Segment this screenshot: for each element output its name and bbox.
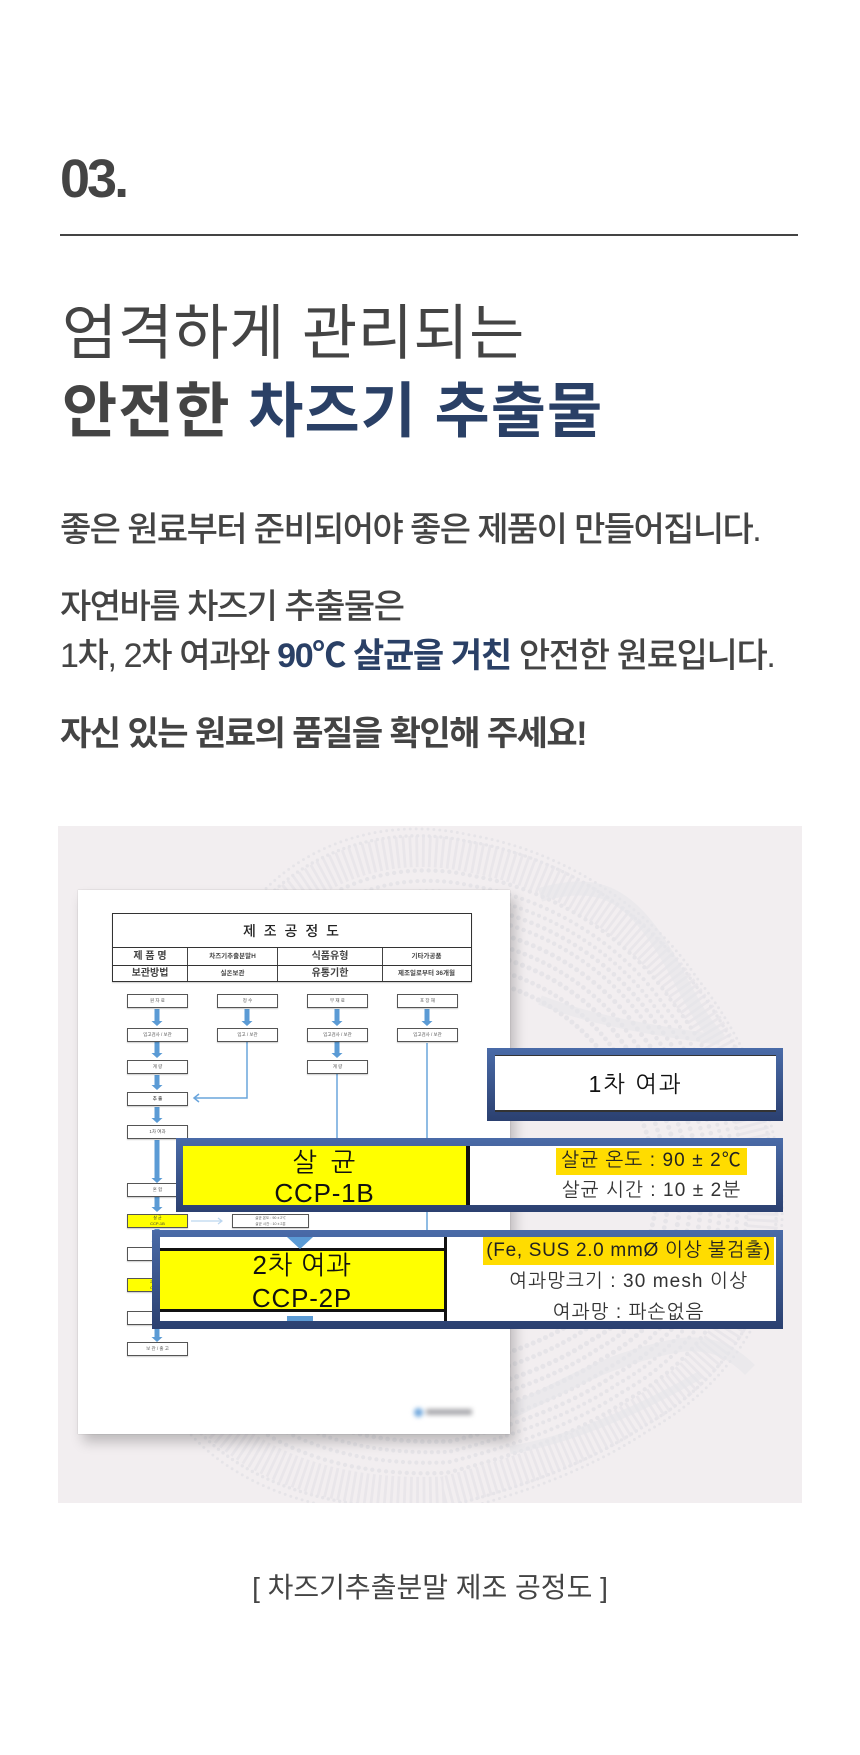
- callout inner: [183, 1146, 776, 1205]
- flow box: 계 량: [333, 1064, 342, 1069]
- flow box: [127, 1247, 188, 1261]
- flow box: [127, 1092, 188, 1106]
- yellow label: [160, 1251, 444, 1309]
- flow box: 입고 / 보관: [237, 1032, 258, 1037]
- table heading: 제 조 공 정 도: [243, 923, 341, 939]
- flow box: 입고검사 / 보관: [143, 1032, 172, 1037]
- flow box: filtering: CCP-2P: [150, 1285, 165, 1290]
- flow box: [307, 1028, 368, 1042]
- flow box: [127, 1028, 188, 1042]
- row 2 label 2: 유통기한: [312, 968, 348, 979]
- flow box: [127, 994, 188, 1008]
- flow box: sterilization detail: 살균 시간 : 10 ± 2분: [255, 1222, 286, 1226]
- row 1 value: [188, 948, 278, 965]
- label code: CCP-1B: [274, 1178, 375, 1208]
- callout: sterilization CCP-1B: [176, 1138, 783, 1212]
- flow box: filtering: 2차 여과: [150, 1279, 165, 1284]
- blurred logo: [411, 1405, 474, 1420]
- logo text: [426, 1409, 472, 1415]
- callout inner: [160, 1237, 776, 1321]
- temperature: 살균 온도 : 90 ± 2℃: [561, 1150, 742, 1171]
- flow box: [397, 994, 458, 1008]
- row 2 value: 실온보관: [221, 970, 244, 977]
- background dotted globe pattern: [190, 828, 784, 1503]
- table: product info: [112, 913, 472, 982]
- title line 1: 엄격하게 관리되는: [62, 300, 525, 367]
- row 1 label 2: [278, 948, 383, 965]
- flow box: sterilization: [127, 1214, 188, 1228]
- body text line 1: 좋은 원료부터 준비되어야 좋은 제품이 만들어집니다.: [60, 511, 760, 549]
- flow box: 입고검사 / 보관: [413, 1032, 442, 1037]
- flow box: [127, 1311, 188, 1325]
- flow box: [127, 1125, 188, 1139]
- callout text: 1차 여과: [588, 1071, 683, 1097]
- label code: CCP-2P: [252, 1283, 352, 1313]
- flow box: 추 출: [153, 1096, 162, 1101]
- flow box: [127, 1060, 188, 1074]
- triangle arrow head: [287, 1237, 313, 1249]
- flow box: 여 과: [153, 1251, 162, 1256]
- flow box: 포 장: [153, 1315, 162, 1320]
- row 1 value 2: 기타가공품: [412, 953, 441, 960]
- divider: [444, 1237, 447, 1321]
- caption: [ 차즈기추출분말 제조 공정도 ]: [252, 1572, 608, 1603]
- panel: manufacturing process chart: [58, 826, 802, 1503]
- section number: 03.: [60, 149, 126, 209]
- label text: 2차 여과: [252, 1250, 352, 1280]
- black rule top: [160, 1248, 447, 1251]
- flow box: 보 관 / 출 고: [146, 1346, 169, 1351]
- flow arrows: [152, 1009, 432, 1342]
- process chart document: [78, 890, 510, 1434]
- callout: 1st filtration: [487, 1048, 783, 1121]
- highlight: [556, 1148, 747, 1175]
- mesh text: 여과망크기 : 30 mesh 이상: [509, 1271, 748, 1292]
- flow box: [307, 1060, 368, 1074]
- flow box: [127, 1183, 188, 1197]
- body text line 3: 1차, 2차 여과와 90℃ 살균을 거친 안전한 원료입니다.: [60, 637, 775, 675]
- row 2 label: [113, 966, 188, 981]
- flow box: 포 장 재: [420, 998, 435, 1003]
- yellow label: [183, 1146, 470, 1205]
- row 2 value: [188, 966, 278, 981]
- highlight: [483, 1237, 774, 1265]
- detection text: (Fe, SUS 2.0 mmØ 이상 불검출): [486, 1240, 771, 1261]
- flow box: 계 량: [153, 1064, 162, 1069]
- flow box: [127, 1342, 188, 1356]
- flow box: [217, 1028, 278, 1042]
- row 1 label 2: 식품유형: [312, 951, 348, 962]
- time: 살균 시간 : 10 ± 2분: [562, 1180, 741, 1201]
- flow box: [307, 994, 368, 1008]
- flow box: 정 수: [243, 998, 252, 1003]
- flow box: 원 자 료: [150, 998, 165, 1003]
- row 2 label: 보관방법: [132, 968, 168, 979]
- flow box: 입고검사 / 보관: [323, 1032, 352, 1037]
- row 1 label: 제 품 명: [133, 951, 167, 962]
- body text bold line: 자신 있는 원료의 품질을 확인해 주세요!: [60, 715, 586, 753]
- damage text: 여과망 : 파손없음: [553, 1302, 704, 1323]
- flow box: [397, 1028, 458, 1042]
- flow box: sterilization: CCP-1B: [150, 1221, 165, 1226]
- flow box: 부 재 료: [330, 998, 345, 1003]
- row 2 value 2: 제조일로부터 36개월: [398, 970, 455, 977]
- arrow stem: [287, 1316, 313, 1321]
- flow box: sterilization: 살 균: [153, 1215, 162, 1220]
- logo mark: [414, 1408, 423, 1417]
- label text: 살 균: [292, 1147, 359, 1177]
- flow box: sterilization detail: 살균 온도 : 90 ± 2℃: [255, 1216, 286, 1220]
- flow box: filtering: [127, 1278, 188, 1292]
- black rule bottom: [160, 1309, 447, 1312]
- callout: 2nd filtration CCP-2P: [152, 1230, 783, 1329]
- flow box: 1차 여과: [149, 1129, 166, 1134]
- flow box: [217, 994, 278, 1008]
- callout inner: [495, 1055, 776, 1112]
- flow box: sterilization detail: [232, 1214, 309, 1228]
- flow box: 혼 합: [153, 1187, 162, 1192]
- title line 2: 안전한 차즈기 추출물: [62, 378, 603, 445]
- row 2 label 2: [278, 966, 383, 981]
- body text line 2: 자연바름 차즈기 추출물은: [60, 588, 403, 626]
- row 1 label: [113, 948, 188, 965]
- row 1 value: 차즈기추출분말H: [209, 953, 256, 960]
